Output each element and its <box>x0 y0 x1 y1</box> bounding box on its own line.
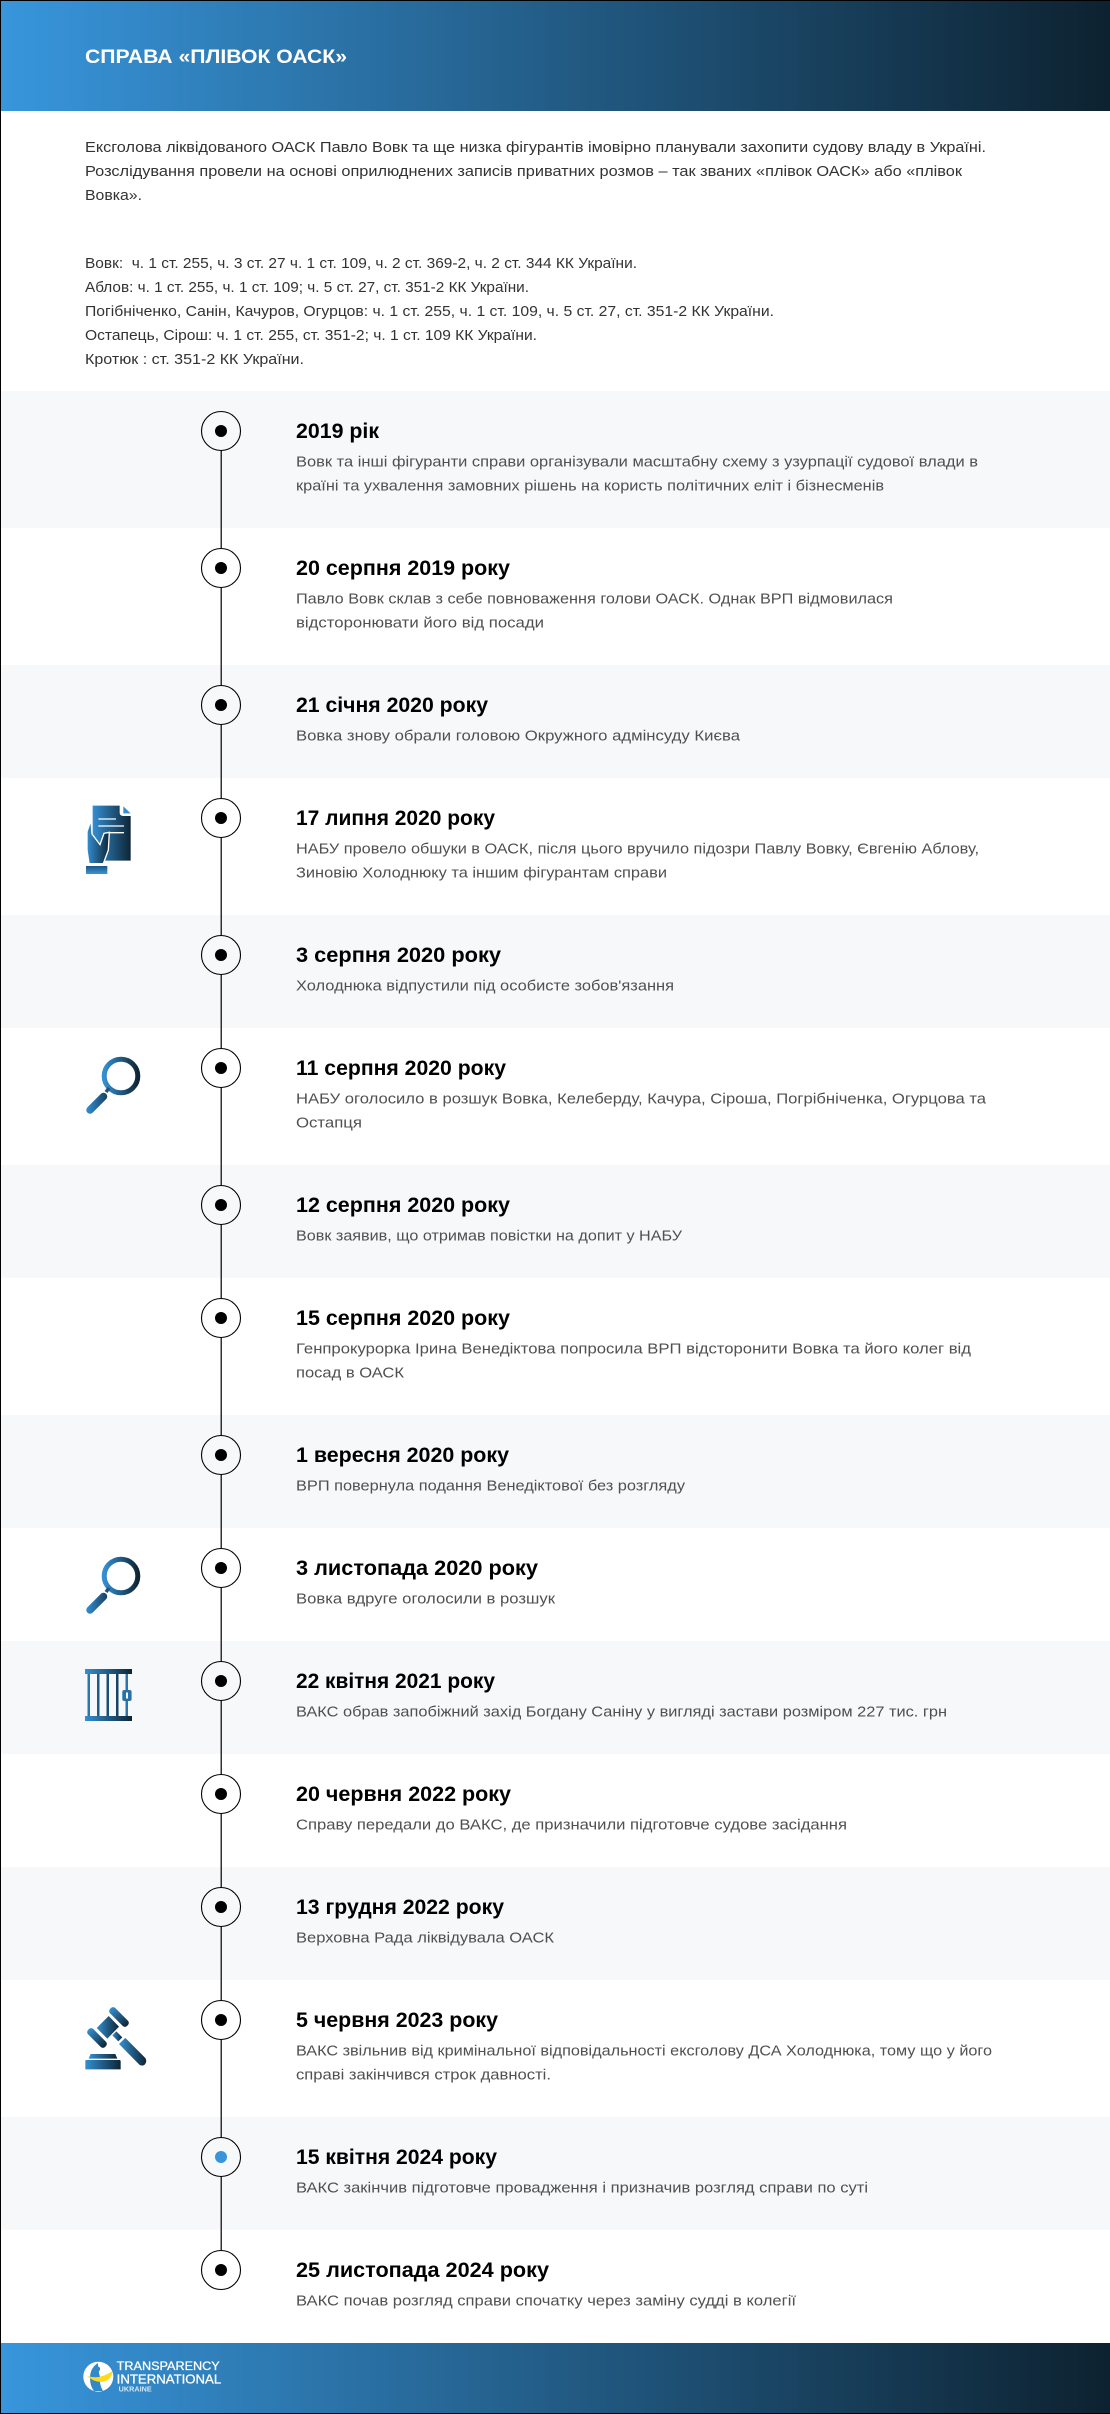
event: 21 січня 2020: Вовка знову обрали головою Окружного адмінсуду Києва <box>296 728 741 744</box>
event: 13 грудня 2022: 13 грудня 2022 року <box>296 1896 504 1919</box>
event: 20 серпня 2019 <box>202 548 893 632</box>
event: 20 серпня 2019: відсторонювати його від посади <box>296 614 544 632</box>
event: 5 червня 2023: 5 червня 2023 року <box>296 2009 498 2032</box>
intro paragraph: Ексголова ліквідованого ОАСК Павло Вовк та ще низка фігурантів імовірно планували захопити судову владу в Україні. <box>85 139 986 156</box>
intro paragraph: Розслідування провели на основі оприлюднених записів приватних розмов – так званих «плівок ОАСК» або «плівок <box>85 163 962 180</box>
event: 5 червня 2023: справі закінчився строк давності. <box>296 2066 551 2084</box>
event: 17 липня 2020: 17 липня 2020 року <box>296 807 495 830</box>
event: 21 січня 2020 <box>202 686 741 744</box>
event: 20 червня 2022 <box>202 1774 847 1834</box>
icon: magnifier <box>90 1059 138 1110</box>
event: 25 листопада 2024: ВАКС почав розгляд справи спочатку через заміну судді в колегії <box>296 2292 797 2310</box>
event: 21 січня 2020: 21 січня 2020 року <box>296 694 488 717</box>
event: 2019: країні та ухвалення замовних рішень на користь політичних еліт і бізнесменів <box>296 478 884 494</box>
event: 2019: Вовк та інші фігуранти справи організували масштабну схему з узурпації судової влади в <box>296 454 978 470</box>
intro paragraph <box>85 139 986 204</box>
event: 20 серпня 2019: 20 серпня 2019 року <box>296 557 510 580</box>
charges list: Остапець, Сірош: ч. 1 ст. 255, ст. 351-2; ч. 1 ст. 109 КК України. <box>85 327 537 344</box>
event: 3 серпня 2020: Холоднюка відпустили під особисте зобов'язання <box>296 978 674 994</box>
event: 1 вересня 2020: 1 вересня 2020 року <box>296 1444 509 1467</box>
alternating row bands <box>0 391 1110 2230</box>
event: 3 листопада 2020: 3 листопада 2020 року <box>296 1557 538 1580</box>
event: 11 серпня 2020 <box>202 1048 987 1132</box>
charges list: Аблов: ч. 1 ст. 255, ч. 1 ст. 109; ч. 5 ст. 27, ст. 351-2 КК України. <box>85 279 529 296</box>
event: 15 квітня 2024 <box>202 2138 868 2196</box>
logo: Transparency International Ukraine <box>83 2361 221 2394</box>
event: 22 квітня 2021: 22 квітня 2021 року <box>296 1670 495 1693</box>
event: 11 серпня 2020: 11 серпня 2020 року <box>296 1057 506 1080</box>
event: 17 липня 2020: Зиновію Холоднюку та іншим фігурантам справи <box>296 864 667 882</box>
event: 3 серпня 2020 <box>202 936 674 994</box>
event: 2019 <box>202 412 978 494</box>
charges list: Вовк: ч. 1 ст. 255, ч. 3 ст. 27 ч. 1 ст. 109, ч. 2 ст. 369-2, ч. 2 ст. 344 КК України. <box>85 255 637 272</box>
event: 15 квітня 2024: 15 квітня 2024 року <box>296 2146 497 2169</box>
event: 1 вересня 2020: ВРП повернула подання Венедіктової без розгляду <box>296 1478 686 1494</box>
event: 22 квітня 2021: ВАКС обрав запобіжний захід Богдану Саніну у вигляді застави розміром 227 тис. грн <box>296 1704 947 1720</box>
event: 2019: 2019 рік <box>296 420 379 443</box>
charges list: Кротюк : ст. 351-2 КК України. <box>85 351 304 368</box>
intro paragraph: Вовка». <box>85 187 142 204</box>
event: 20 червня 2022: 20 червня 2022 року <box>296 1783 511 1806</box>
event: 15 серпня 2020 <box>202 1298 971 1382</box>
event: 5 червня 2023: ВАКС звільнив від кримінальної відповідальності ексголову ДСА Холоднюка, тому що у його <box>296 2042 992 2060</box>
event: 5 червня 2023 <box>202 2000 992 2084</box>
event: 17 липня 2020: НАБУ провело обшуки в ОАСК, після цього вручило підозри Павлу Вовку, Євгенію Аблову, <box>296 840 979 858</box>
footer banner <box>0 2343 1110 2413</box>
event: 3 листопада 2020 <box>202 1548 555 1608</box>
event: 3 серпня 2020: 3 серпня 2020 року <box>296 944 501 967</box>
logo: Transparency International Ukraine: UKRAINE <box>119 2387 152 2394</box>
event: 17 липня 2020 <box>202 798 979 882</box>
event: 12 серпня 2020: 12 серпня 2020 року <box>296 1194 510 1217</box>
icon: document in hand <box>86 806 131 874</box>
icon: gavel <box>85 2006 146 2069</box>
event: 22 квітня 2021 <box>202 1662 947 1720</box>
event: 11 серпня 2020: НАБУ оголосило в розшук Вовка, Келеберду, Качура, Сіроша, Погрібніченка, Огурцова та <box>296 1090 987 1108</box>
event: 13 грудня 2022: Верховна Рада ліквідувала ОАСК <box>296 1930 554 1946</box>
event: 1 вересня 2020 <box>202 1436 686 1494</box>
event: 20 серпня 2019: Павло Вовк склав з себе повноваження голови ОАСК. Однак ВРП відмовилася <box>296 590 893 608</box>
event: 11 серпня 2020: Остапця <box>296 1114 362 1132</box>
event: 15 серпня 2020: Генпрокурорка Ірина Венедіктова попросила ВРП відсторонити Вовка та його колег від <box>296 1340 971 1358</box>
event: 20 червня 2022: Справу передали до ВАКС, де призначили підготовче судове засідання <box>296 1816 847 1834</box>
event: 3 листопада 2020: Вовка вдруге оголосили в розшук <box>296 1590 555 1608</box>
logo: Transparency International Ukraine: INTERNATIONAL <box>117 2372 221 2386</box>
event: 13 грудня 2022 <box>202 1888 554 1946</box>
icon: prison bars <box>85 1669 132 1721</box>
logo: Transparency International Ukraine: TRANSPARENCY <box>117 2361 220 2373</box>
event: 15 квітня 2024: ВАКС закінчив підготовче провадження і призначив розгляд справи по суті <box>296 2180 868 2196</box>
timeline spine <box>221 431 222 2270</box>
event: 12 серпня 2020 <box>202 1186 683 1244</box>
title: СПРАВА «ПЛІВОК ОАСК» <box>85 47 347 68</box>
icon: magnifier <box>90 1559 138 1610</box>
charges list: Погібніченко, Санін, Качуров, Огурцов: ч. 1 ст. 255, ч. 1 ст. 109, ч. 5 ст. 27, ст. 351-2 КК України. <box>85 303 774 320</box>
event: 12 серпня 2020: Вовк заявив, що отримав повістки на допит у НАБУ <box>296 1228 683 1244</box>
event: 15 серпня 2020: 15 серпня 2020 року <box>296 1307 510 1330</box>
event: 25 листопада 2024 <box>202 2250 797 2310</box>
event: 25 листопада 2024: 25 листопада 2024 року <box>296 2259 549 2282</box>
event: 15 серпня 2020: посад в ОАСК <box>296 1364 404 1382</box>
header banner <box>0 0 1110 111</box>
charges list <box>85 255 774 368</box>
